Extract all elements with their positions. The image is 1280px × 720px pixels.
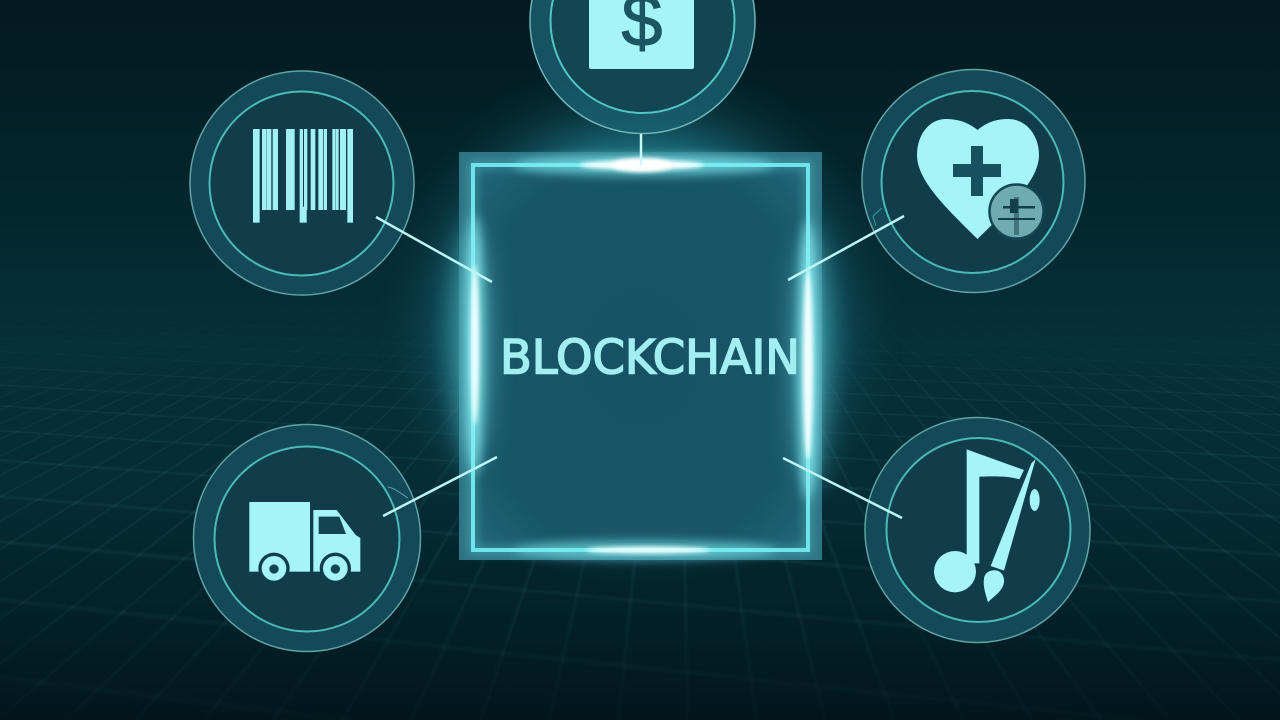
icon: heart with plus: [917, 119, 1044, 239]
background perspective grid: [0, 332, 1280, 694]
central glow: [375, 50, 905, 590]
connector: barcode to panel: [376, 217, 492, 282]
panel: blockchain frame: [452, 152, 830, 560]
decoration: connector hook: [873, 208, 882, 226]
connector: dollar to panel: [640, 134, 642, 165]
icon: delivery truck: [249, 502, 360, 584]
connector: music to panel: [783, 458, 902, 518]
node: truck: [194, 424, 420, 652]
icon: barcode: [253, 129, 353, 223]
node: barcode: [190, 71, 414, 295]
decoration: connector arc: [388, 487, 408, 498]
connector: truck to panel: [383, 457, 497, 516]
node: health heart: [862, 70, 1085, 292]
icon: dollar card: [589, 0, 694, 69]
outer translucent band: [459, 152, 822, 560]
node: dollar: [530, 0, 755, 134]
connector: heart to panel: [788, 216, 904, 280]
light flares: [452, 154, 830, 560]
title: BLOCKCHAIN: BLOCKCHAIN: [500, 330, 800, 386]
neon border: [473, 165, 808, 550]
inner panel: [474, 165, 807, 550]
icon: music note and paintbrush: [934, 449, 1040, 602]
node: music and art: [865, 418, 1090, 642]
